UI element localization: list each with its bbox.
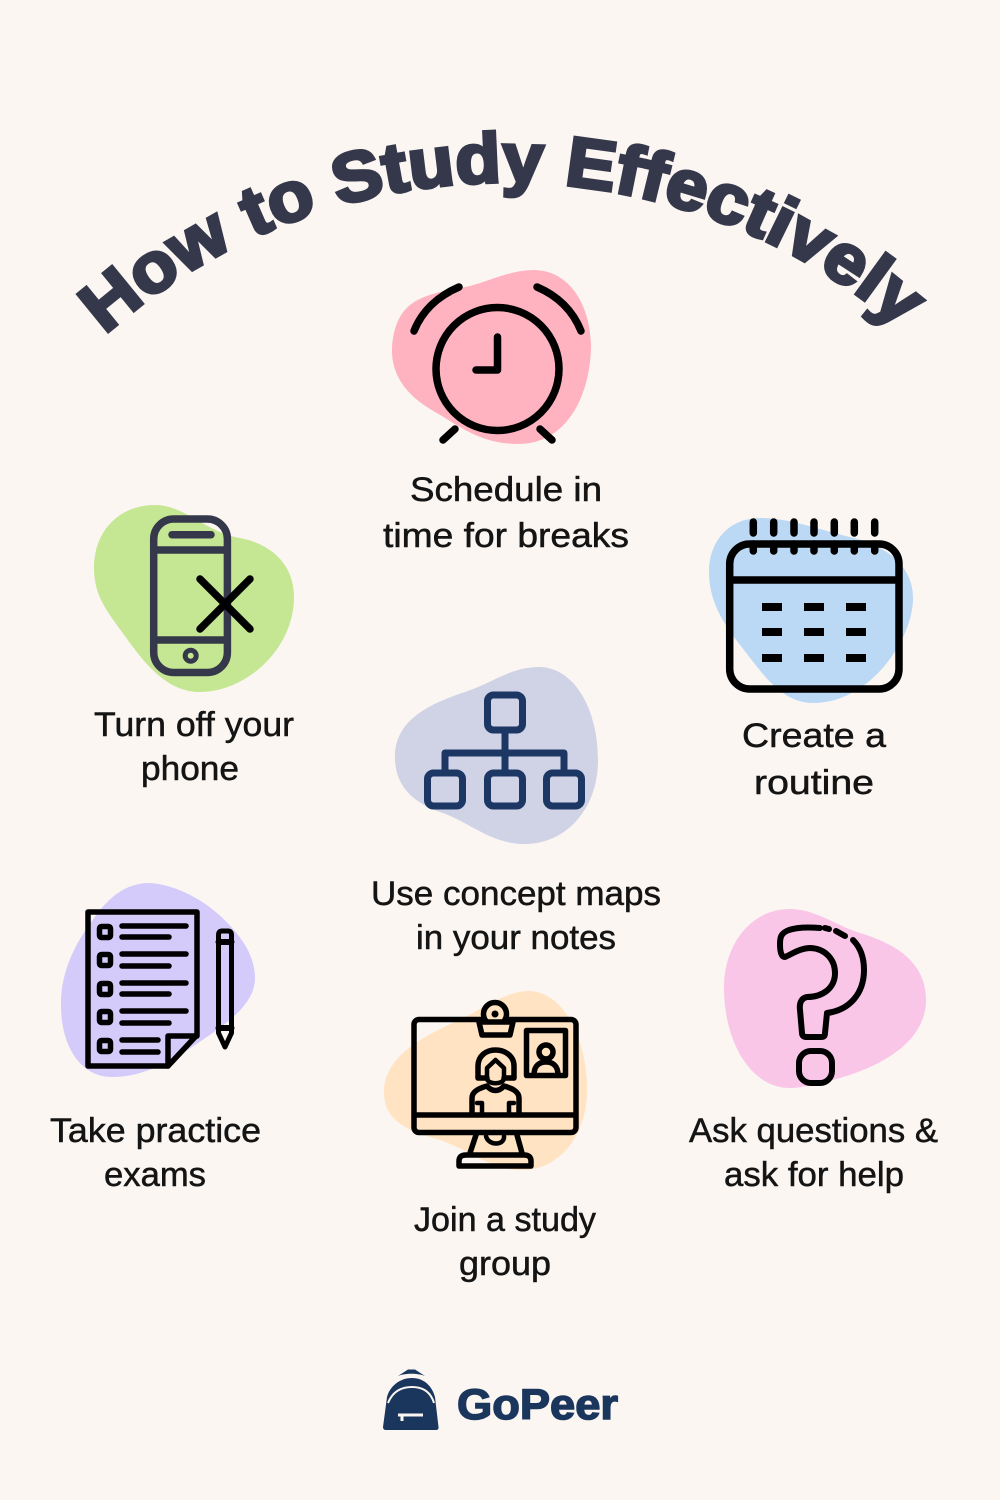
panel: schedule breaks <box>383 270 629 555</box>
label: phone <box>94 706 294 788</box>
icon: question mark <box>780 927 864 1083</box>
label: schedule: Schedule in <box>410 471 602 509</box>
icon: backpack <box>383 1370 439 1430</box>
wordmark: GoPeer <box>457 1381 618 1429</box>
logo: GoPeer <box>383 1370 618 1430</box>
panel: practice exams <box>50 883 261 1194</box>
icon: exam sheet <box>88 912 197 1066</box>
label: exams: exams <box>104 1156 206 1194</box>
panel: concept maps <box>371 667 661 957</box>
blob: blue <box>709 518 913 703</box>
blob: purple <box>61 883 255 1077</box>
blob: green <box>94 505 294 692</box>
label: study group: Join a study <box>414 1201 596 1239</box>
panel: study group <box>384 991 596 1283</box>
label: routine <box>742 717 886 802</box>
label: phone: phone <box>141 750 239 788</box>
blob: orchid <box>724 909 926 1088</box>
icon: computer video call <box>414 1002 576 1166</box>
label: questions <box>689 1112 938 1194</box>
icon: cross <box>200 579 250 629</box>
label: questions: Ask questions & <box>689 1112 938 1150</box>
label: questions: ask for help <box>724 1156 904 1194</box>
label: routine: Create a <box>742 717 886 755</box>
label: study group <box>414 1201 596 1283</box>
label: phone: Turn off your <box>94 706 294 744</box>
panel: ask questions <box>689 909 938 1194</box>
label: study group: group <box>459 1245 551 1283</box>
icon: phone with cross <box>154 519 227 672</box>
icon: pencil <box>218 931 232 1047</box>
label: concept maps <box>371 875 661 957</box>
title: How to Study Effectively <box>76 130 928 334</box>
label: exams <box>50 1112 261 1194</box>
blob: pink <box>392 270 591 444</box>
label: schedule: time for breaks <box>383 517 629 555</box>
label: exams: Take practice <box>50 1112 261 1150</box>
blob: peach <box>384 991 587 1170</box>
label: concept maps: in your notes <box>416 919 616 957</box>
label: concept maps: Use concept maps <box>371 875 661 913</box>
icon: calendar <box>730 522 899 689</box>
icon: alarm clock <box>414 287 581 440</box>
blob: slate <box>395 667 598 844</box>
panel: create routine <box>709 518 913 802</box>
panel: turn off phone <box>94 505 294 788</box>
icon: concept map <box>428 695 582 806</box>
label: schedule <box>383 471 629 555</box>
label: routine: routine <box>754 764 874 802</box>
